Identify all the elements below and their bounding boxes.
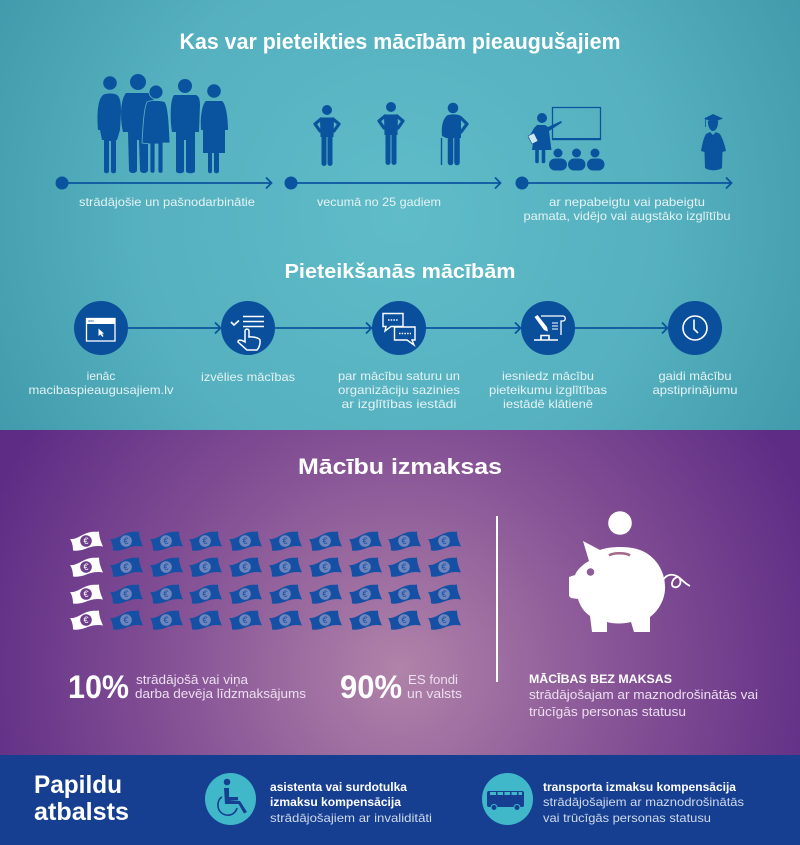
text: transport compensation (543, 780, 744, 825)
blue banknotes row 1: € (401, 536, 407, 546)
title: Kas var pieteikties mācībām pieaugušajiem (180, 29, 620, 54)
step 5 text: gaidi mācību (658, 369, 732, 383)
blue banknotes row 4 (110, 610, 461, 630)
icon: adult (379, 102, 403, 162)
blue banknotes row 4: € (362, 615, 368, 625)
label: education: pamata, vidējo vai augstāko izglītību (524, 209, 730, 223)
step 3 text: par mācību saturu un (338, 369, 460, 383)
text: assistant compensation (270, 780, 432, 825)
icon: young person (315, 105, 339, 164)
stat: 10%: 10% (68, 669, 129, 705)
blue banknotes row 3: € (163, 589, 169, 599)
step 4 text: pieteikumu izglītības (489, 383, 607, 397)
stat: 10%: strādājošā vai viņa (136, 672, 249, 687)
divider (496, 516, 498, 682)
text: transport compensation: strādājošajiem ar maznodrošinātās (543, 795, 744, 809)
stat: 90% (340, 669, 463, 705)
blue banknotes row 1 (110, 532, 461, 551)
blue banknotes row 3: € (401, 589, 407, 599)
heading: additional support: atbalsts (34, 798, 129, 826)
white banknotes column: € (83, 589, 89, 599)
icon: chat (372, 301, 426, 355)
step 3 text (338, 369, 460, 411)
blue banknotes row 1: € (123, 536, 129, 546)
blue banknotes row 3: € (123, 589, 129, 599)
label: education (524, 195, 730, 223)
blue banknotes row 4: € (242, 615, 248, 625)
blue banknotes row 2: € (282, 562, 288, 572)
heading: additional support (34, 771, 129, 826)
arrow: education (516, 176, 732, 190)
panel: course costs (0, 430, 800, 755)
icon: group of working people (98, 74, 228, 173)
blue banknotes row 4: € (123, 615, 129, 625)
label: working people: strādājošie un pašnodarbinātie (79, 195, 255, 209)
text: free courses (529, 672, 758, 719)
heading: costs: Mācību izmaksas (298, 454, 502, 479)
white banknotes column: € (83, 615, 89, 625)
step 1 text: ienāc (87, 369, 115, 383)
blue banknotes row 3: € (362, 589, 368, 599)
heading: application: Pieteikšanās mācībām (284, 261, 516, 283)
blue banknotes row 4: € (401, 615, 407, 625)
step 4 text: iestādē klātienē (503, 397, 593, 411)
blue banknotes row 2: € (441, 562, 447, 572)
blue banknotes row 3: € (202, 589, 208, 599)
label: age: vecumā no 25 gadiem (317, 195, 441, 209)
stat: 90%: ES fondi (408, 672, 458, 687)
icon: bus (482, 773, 533, 825)
blue banknotes row 4: € (202, 615, 208, 625)
blue banknotes row 3 (110, 584, 461, 604)
chart: banknotes 10% and 90% (70, 532, 461, 630)
icon: browser step (74, 301, 128, 355)
text: assistant compensation: asistenta vai surdotulka (270, 780, 407, 794)
blue banknotes row 4: € (282, 615, 288, 625)
white banknotes column: € (83, 536, 89, 546)
text: free courses: strādājošajam ar maznodrošinātās vai (529, 687, 758, 702)
blue banknotes row 4: € (163, 615, 169, 625)
step 3 text: ar izglītības iestādi (342, 397, 456, 411)
step 2 text: izvēlies mācības (201, 370, 295, 384)
step 5 text: apstiprinājumu (652, 383, 738, 397)
step 5 text (652, 369, 738, 397)
text: assistant compensation: strādājošajiem ar invaliditāti (270, 811, 432, 825)
blue banknotes row 1: € (282, 536, 288, 546)
stat: 10%: darba devēja līdzmaksājums (135, 686, 307, 701)
blue banknotes row 2: € (202, 562, 208, 572)
icon: graduate (701, 114, 726, 170)
icon: application scroll (521, 301, 575, 355)
icon: teacher with class (528, 108, 604, 170)
text: assistant compensation: izmaksu kompensācija (270, 795, 401, 809)
step 3 text: organizāciju sazinies (338, 383, 460, 397)
blue banknotes row 3: € (242, 589, 248, 599)
panel: additional support (0, 755, 800, 845)
step 4 text: iesniedz mācību (502, 369, 594, 383)
blue banknotes row 3: € (441, 589, 447, 599)
blue banknotes row 1: € (163, 536, 169, 546)
icon: senior with cane (442, 103, 467, 165)
step 1 text: macibaspieaugusajiem.lv (28, 383, 174, 397)
label: education: ar nepabeigtu vai pabeigtu (549, 195, 705, 209)
step connectors (128, 322, 668, 334)
text: free courses: trūcīgās personas statusu (529, 704, 686, 719)
blue banknotes row 1: € (202, 536, 208, 546)
arrow: age (284, 176, 500, 190)
blue banknotes row 4: € (441, 615, 447, 625)
blue banknotes row 2 (110, 558, 461, 577)
step 1 text (28, 369, 174, 397)
icon: wheelchair (205, 773, 256, 825)
blue banknotes row 1: € (441, 536, 447, 546)
blue banknotes row 3: € (282, 589, 288, 599)
blue banknotes row 1: € (362, 536, 368, 546)
blue banknotes row 2: € (401, 562, 407, 572)
blue banknotes row 4: € (322, 615, 328, 625)
heading: additional support: Papildu (34, 771, 122, 799)
blue banknotes row 1: € (322, 536, 328, 546)
blue banknotes row 2: € (322, 562, 328, 572)
stat: 90%: un valsts (407, 686, 463, 701)
panel: who can apply (0, 0, 800, 430)
icon: clock (668, 301, 722, 355)
text: free courses: MĀCĪBAS BEZ MAKSAS (529, 672, 672, 686)
blue banknotes row 2: € (123, 562, 129, 572)
stat: 90%: 90% (340, 669, 402, 705)
arrow: working people (56, 176, 272, 190)
text: transport compensation: vai trūcīgās personas statusu (543, 811, 711, 825)
blue banknotes row 3: € (322, 589, 328, 599)
icon: piggy bank (569, 511, 690, 632)
blue banknotes row 2: € (362, 562, 368, 572)
blue banknotes row 2: € (242, 562, 248, 572)
step 4 text (489, 369, 607, 411)
icon: select course (221, 301, 275, 355)
white banknotes column (70, 532, 103, 630)
stat: 10% (68, 669, 307, 705)
blue banknotes row 1: € (242, 536, 248, 546)
white banknotes column: € (83, 562, 89, 572)
text: transport compensation: transporta izmaksu kompensācija (543, 780, 736, 794)
blue banknotes row 2: € (163, 562, 169, 572)
